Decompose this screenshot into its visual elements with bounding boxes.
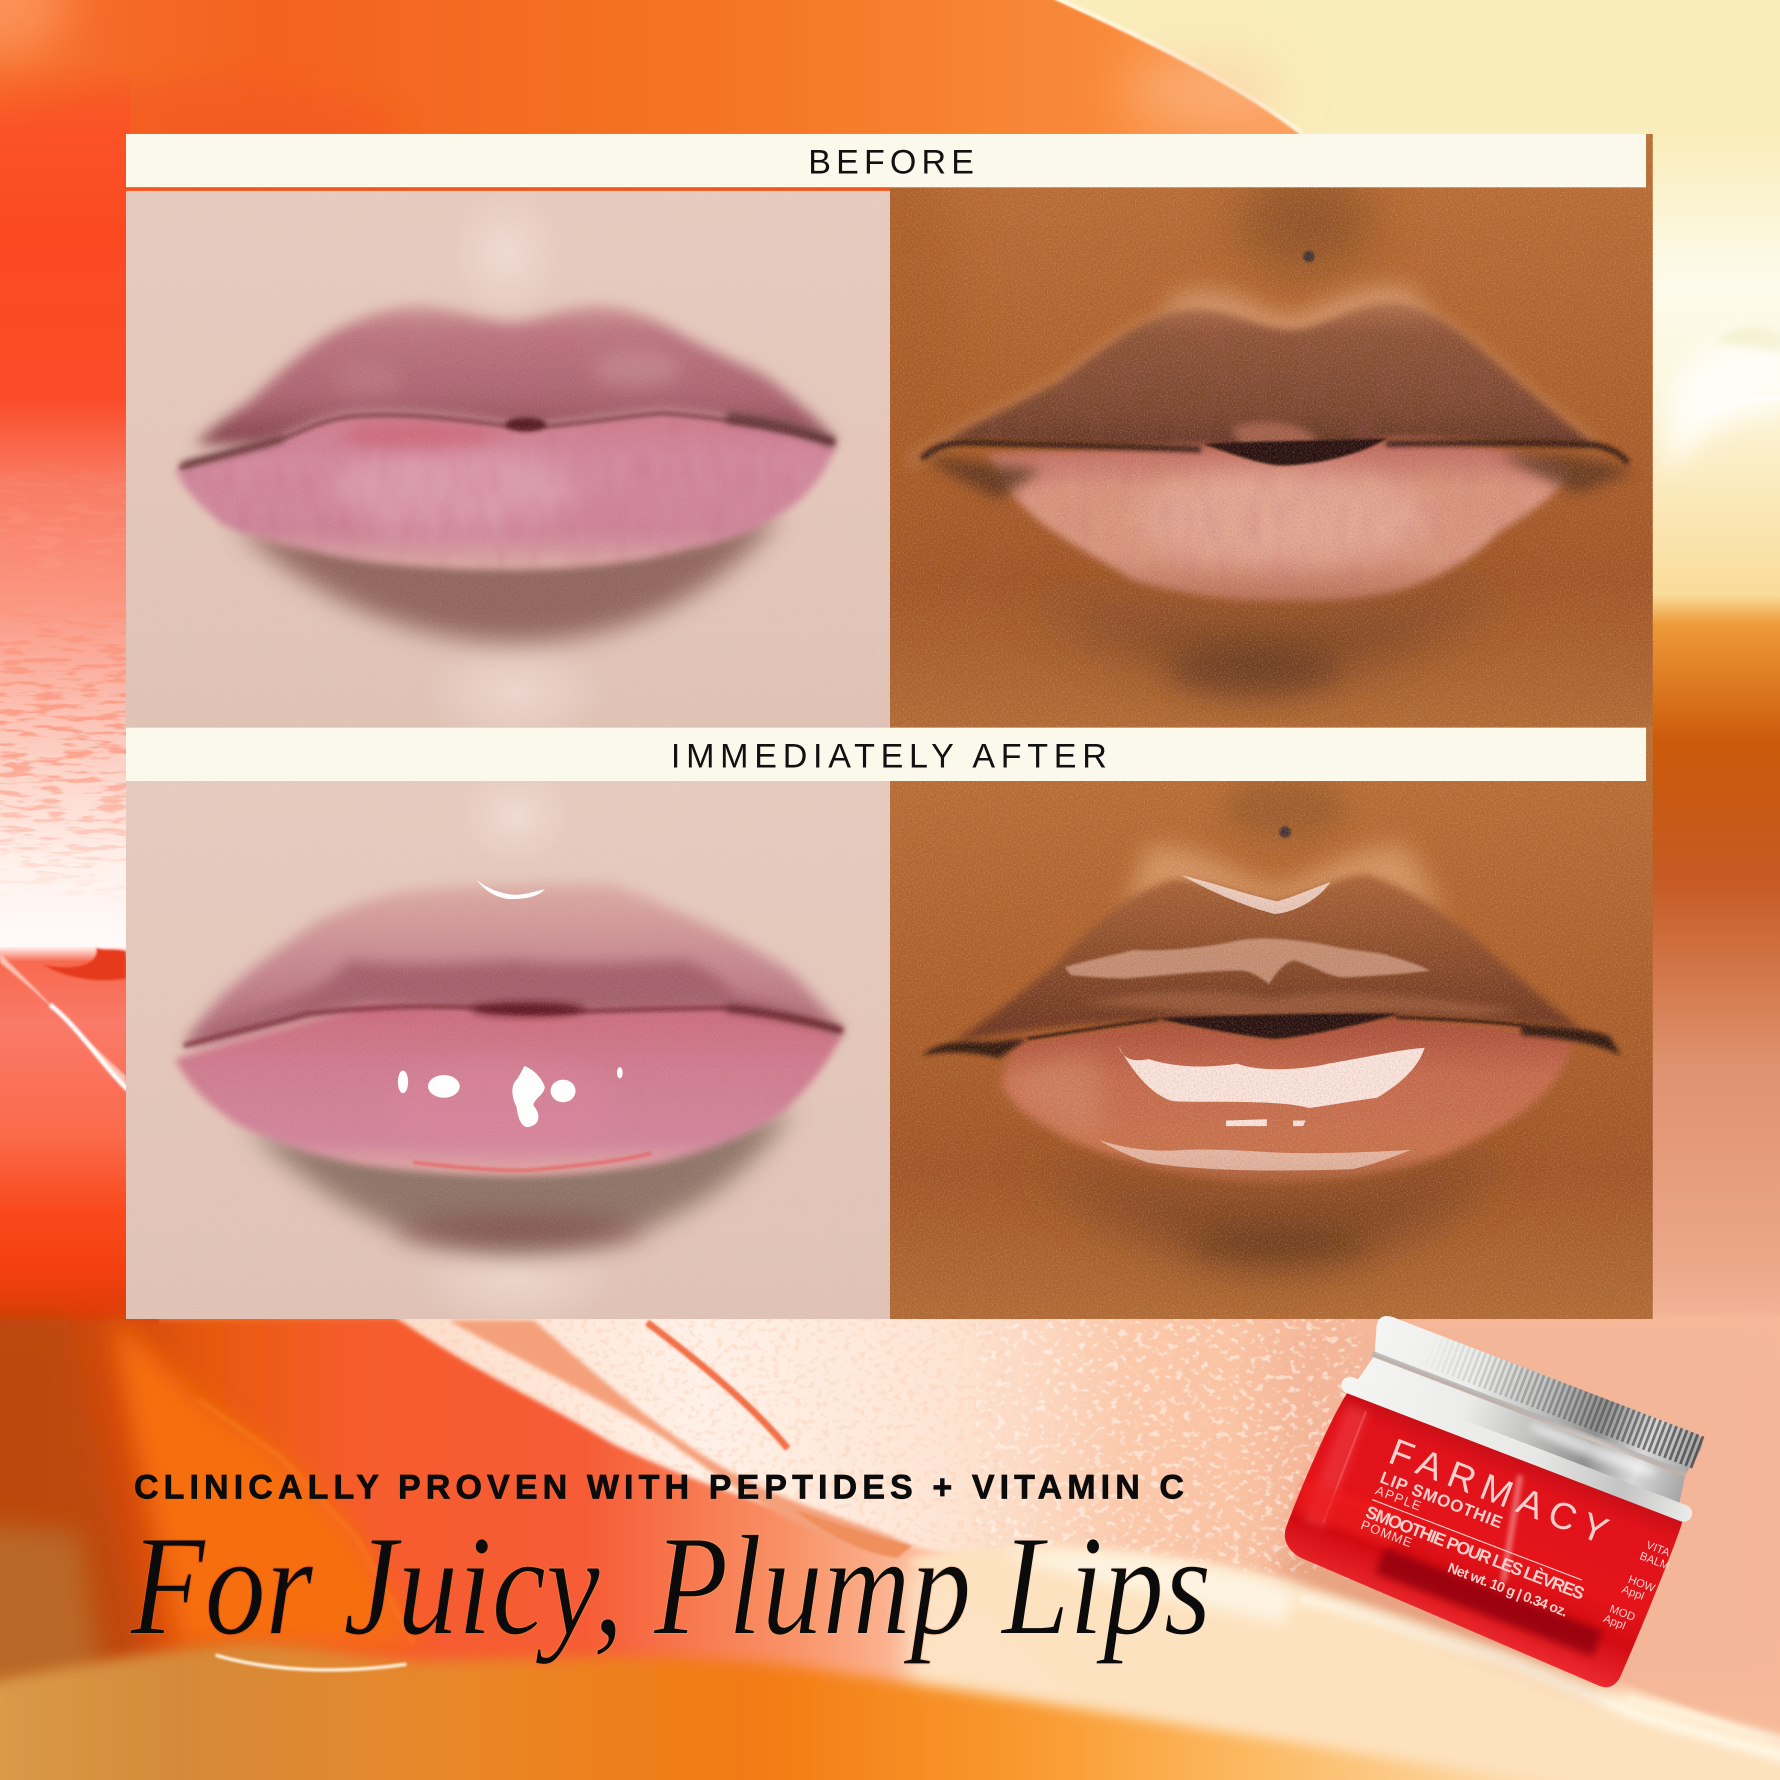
- upper lip: [184, 884, 842, 1046]
- mouth opening and corners: [922, 1039, 1027, 1058]
- before label band: BEFORE: [808, 144, 974, 182]
- jar label text: VITA: [1644, 1539, 1672, 1560]
- before photo: right deep-skin lips: [890, 134, 1653, 728]
- gloss highlights: [398, 880, 623, 1127]
- lower lip: [976, 437, 1578, 607]
- before label band: [126, 134, 1646, 191]
- orange swatch streaks: [448, 1320, 912, 1558]
- claim line: CLINICALLY PROVEN WITH PEPTIDES + VITAMIN C: [134, 1468, 1184, 1506]
- jar label text: SMOOTHIE POUR LES LÈVRES: [1363, 1501, 1588, 1604]
- after photo: left fair-skin glossy lips: [126, 781, 890, 1320]
- chin shadow: [1022, 1147, 1510, 1269]
- pale swatch: [392, 1315, 1780, 1754]
- upper lip: [170, 297, 840, 445]
- mouth line: [922, 443, 1201, 459]
- lower lip: [1002, 1021, 1571, 1183]
- jar label text: [1355, 1430, 1680, 1649]
- lower lip: [175, 1005, 842, 1176]
- jar lid: [1367, 1313, 1706, 1475]
- headline: For Juicy, Plump Lips: [130, 1507, 1211, 1665]
- right edge strip: [1635, 0, 1780, 1351]
- jar shadow: [1279, 1549, 1611, 1694]
- philtrum shade: [1237, 170, 1374, 272]
- cream band: [908, 1546, 1780, 1780]
- gloss highlights: [1099, 875, 1425, 1171]
- mouth line: [179, 413, 834, 468]
- jar body: [1273, 1389, 1683, 1693]
- jar label text: HOW: [1626, 1574, 1657, 1595]
- jar label text: Appl: [1620, 1584, 1646, 1603]
- before photo: left fair-skin lips: [126, 190, 890, 728]
- mouth line: [184, 1007, 842, 1046]
- chin shadow: [233, 513, 783, 643]
- immediately after label band: [126, 728, 1646, 781]
- after photo: right deep-skin glossy lips: [890, 726, 1653, 1320]
- jar label text: APPLE: [1373, 1483, 1423, 1514]
- jar label text: MOD: [1608, 1603, 1637, 1624]
- mole: [1279, 826, 1291, 838]
- jar label text: Appl: [1602, 1613, 1627, 1632]
- left edge strip: [0, 134, 159, 1340]
- jar label text: FARMACY: [1384, 1430, 1614, 1552]
- upper lip: [909, 303, 1595, 463]
- immediately after label band: IMMEDIATELY AFTER: [671, 737, 1107, 775]
- product jar: Farmacy Lip Smoothie: [1271, 1308, 1720, 1701]
- jar label text: Net wt. 10 g | 0.34 oz.: [1445, 1560, 1570, 1621]
- jar label text: LIP SMOOTHIE: [1377, 1468, 1505, 1532]
- mole: [1303, 251, 1315, 262]
- upper lip: [954, 874, 1581, 1042]
- chin shadow: [1022, 579, 1510, 687]
- philtrum light: [1124, 845, 1447, 920]
- jar label text: BALM: [1638, 1550, 1671, 1573]
- bottom area: [0, 1319, 1780, 1780]
- jar label text: POMME: [1359, 1517, 1414, 1550]
- lower lip: [170, 403, 840, 573]
- chin shadow: [244, 1107, 795, 1253]
- bottom orange glossy wave: [0, 1644, 1780, 1780]
